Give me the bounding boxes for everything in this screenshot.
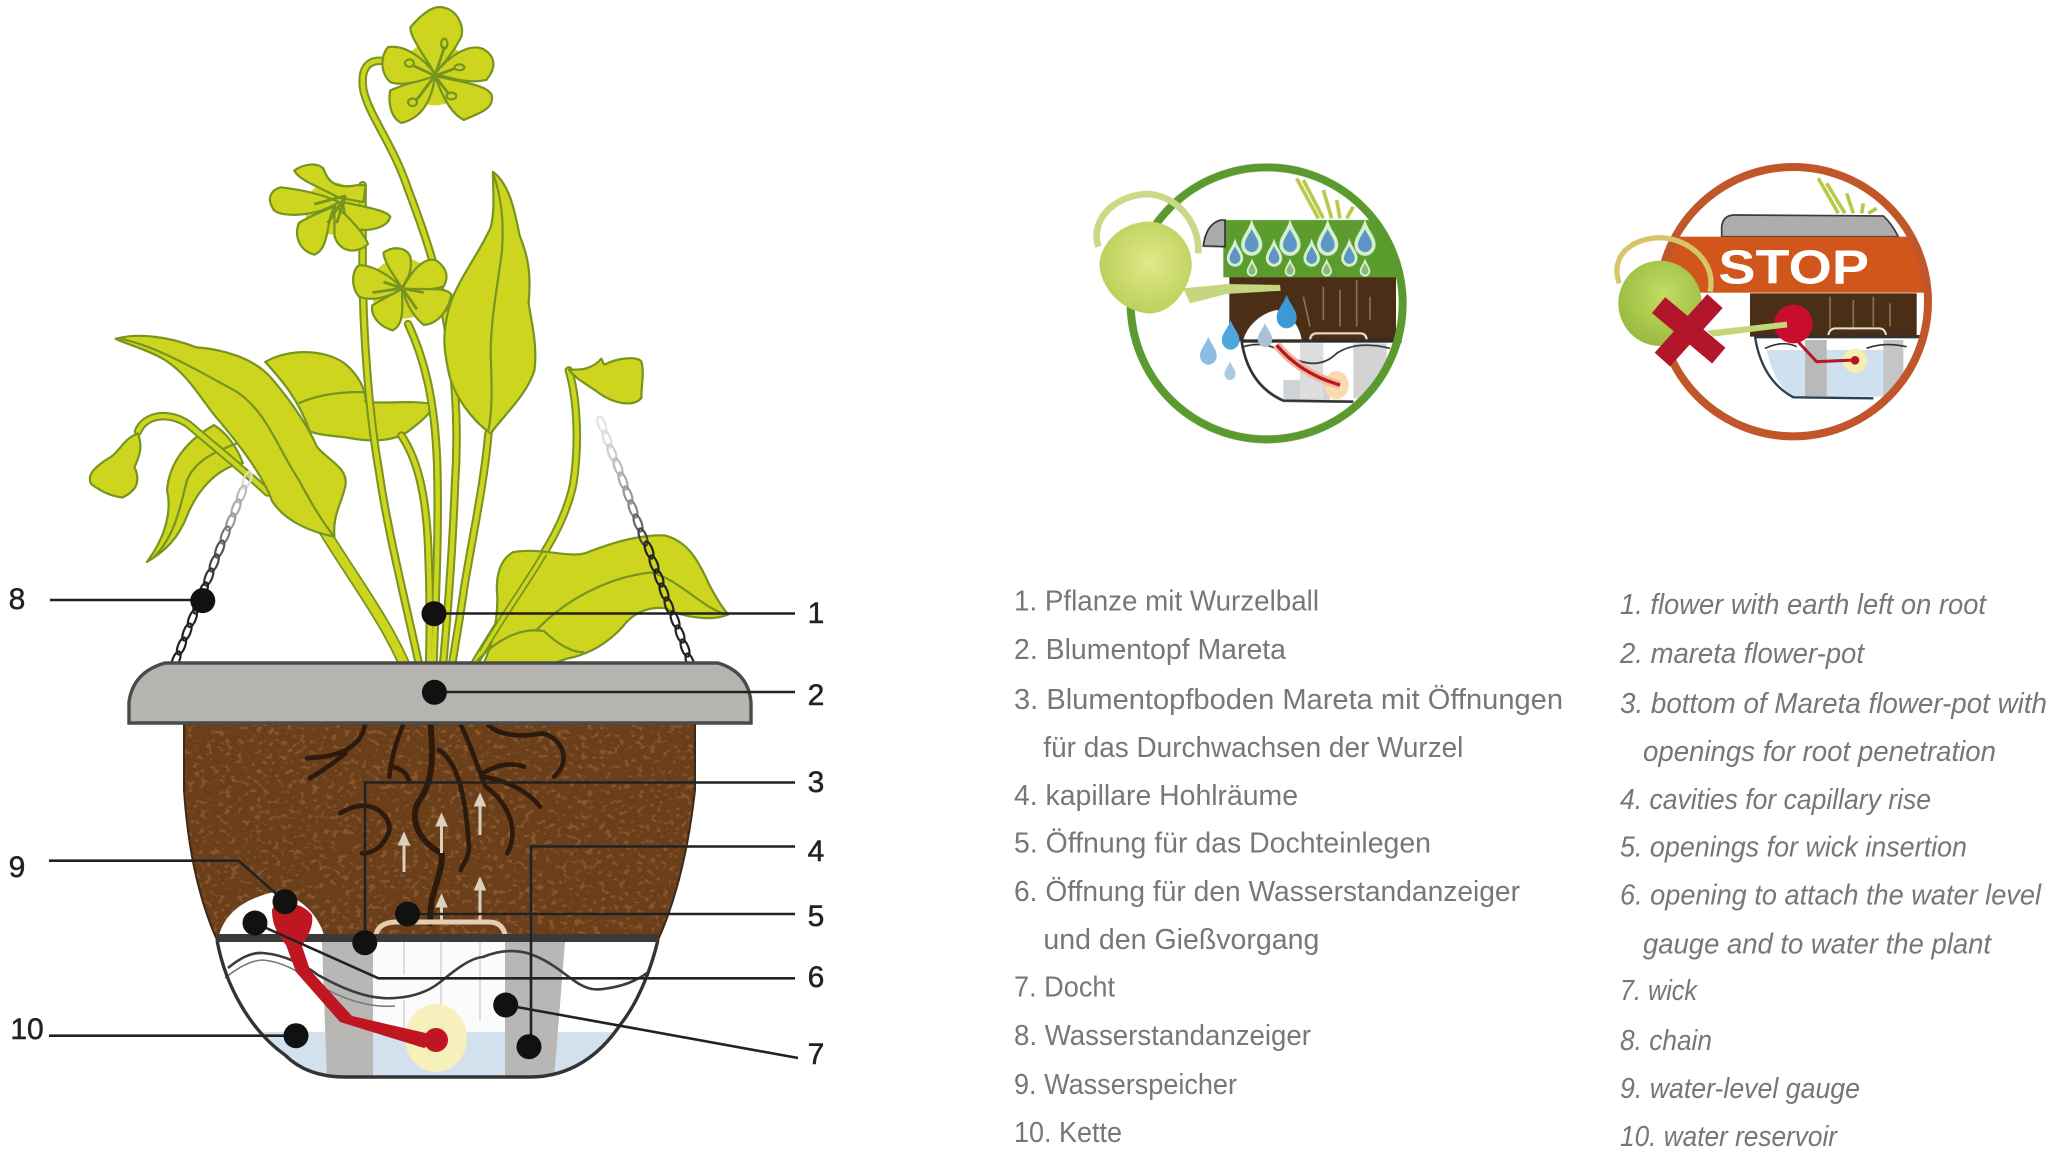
chain: right <box>596 415 696 672</box>
tall right leaf <box>444 172 535 434</box>
left bud <box>90 434 140 498</box>
callout dots <box>190 588 542 1059</box>
ring <box>1131 167 1403 439</box>
callout leader lines <box>49 600 798 1058</box>
roots <box>307 725 564 923</box>
item 2: 2. Blumentopf Mareta <box>1014 634 1287 666</box>
item 9: 9. Wasserspeicher <box>1014 1069 1237 1101</box>
item 1: 1. flower with earth left on root <box>1620 589 1988 621</box>
callout numbers: 10 <box>10 1013 44 1046</box>
legend: German <box>1014 586 1563 1149</box>
wick slot <box>376 922 505 935</box>
item 6: 6. Öffnung für den Wasserstandanzeiger <box>1014 876 1520 908</box>
icon: correct watering <box>1097 167 1410 439</box>
callout numbers: 9 <box>9 851 25 884</box>
second flower <box>270 165 390 255</box>
item 8: 8. Wasserstandanzeiger <box>1014 1020 1311 1052</box>
callout numbers: 5 <box>808 900 824 933</box>
back leaf <box>265 352 433 440</box>
item 7: 7. Docht <box>1014 972 1115 1004</box>
capillary arrows <box>400 796 484 923</box>
item 9: 9. water-level gauge <box>1620 1073 1860 1105</box>
lower bowl with water reservoir <box>217 940 658 1082</box>
item 1: 1. Pflanze mit Wurzelball <box>1014 586 1319 618</box>
wick glow <box>405 1004 467 1072</box>
wick slot <box>1828 328 1886 335</box>
soil band <box>1750 293 1917 337</box>
reservoir bowl <box>1755 337 1923 398</box>
red stop point and wick <box>1774 305 1859 365</box>
soil band <box>1229 277 1396 341</box>
item 8: 8. chain <box>1620 1025 1712 1057</box>
water drops on green <box>1228 225 1374 276</box>
green panel <box>1223 220 1410 277</box>
reservoir bowl <box>1242 341 1403 401</box>
item 5: 5. openings for wick insertion <box>1620 832 1967 864</box>
callout numbers: 3 <box>808 766 824 799</box>
orange band <box>1653 237 1930 293</box>
callout numbers: 4 <box>808 835 824 868</box>
grass <box>1297 178 1353 218</box>
item 3 continued: openings for root penetration <box>1643 736 1996 768</box>
item 2: 2. mareta flower-pot <box>1619 638 1866 670</box>
item 10: 10. water reservoir <box>1620 1121 1838 1153</box>
top flower <box>382 7 493 123</box>
lower right leaf <box>468 535 728 690</box>
illustration: pot cross-section <box>129 663 751 1082</box>
item 7: 7. wick <box>1620 975 1698 1007</box>
grass <box>1818 178 1877 213</box>
falling drops <box>1200 295 1297 380</box>
item 3 continued: für das Durchwachsen der Wurzel <box>1043 732 1463 764</box>
watering can <box>1097 194 1281 313</box>
item 4: 4. cavities for capillary rise <box>1620 784 1931 816</box>
chain: left <box>169 470 254 670</box>
pot rim <box>129 663 751 723</box>
icon: stop overfilling <box>1617 167 1930 436</box>
watering can <box>1617 238 1787 346</box>
pot lip <box>1203 220 1225 247</box>
item 5: 5. Öffnung für das Dochteinlegen <box>1014 828 1431 860</box>
callout numbers: 8 <box>9 583 25 616</box>
callout numbers: 1 <box>808 597 824 630</box>
water level gauge <box>272 903 448 1052</box>
third flower <box>353 248 451 330</box>
callout numbers: 2 <box>808 679 824 712</box>
lower left leaf <box>147 425 243 562</box>
item 6 continued: und den Gießvorgang <box>1043 924 1319 956</box>
item 10: 10. Kette <box>1014 1117 1122 1149</box>
item 4: 4. kapillare Hohlräume <box>1014 780 1298 812</box>
plant stems <box>138 61 577 690</box>
wick <box>1277 345 1340 385</box>
soil <box>184 723 696 941</box>
water gauge dome <box>219 892 324 935</box>
item 6 continued: gauge and to water the plant <box>1643 928 1993 960</box>
illustration: plant <box>90 7 728 690</box>
item 3: 3. Blumentopfboden Mareta mit Öffnungen <box>1014 684 1563 716</box>
callout numbers <box>9 583 824 1071</box>
gauge dome <box>1243 310 1302 340</box>
wick slot <box>1310 333 1367 340</box>
right bud <box>569 358 643 403</box>
pot rim <box>1722 215 1898 237</box>
stem over lower right leaf <box>482 553 544 652</box>
ring <box>1659 167 1928 436</box>
yellow glow <box>1843 349 1867 373</box>
divider floor <box>217 934 658 942</box>
STOP text: STOP <box>1718 240 1869 294</box>
red cross <box>1652 294 1725 366</box>
legend: English <box>1619 589 2047 1153</box>
callout numbers: 7 <box>808 1038 824 1071</box>
callout numbers: 6 <box>808 961 824 994</box>
large left leaf <box>116 336 346 537</box>
